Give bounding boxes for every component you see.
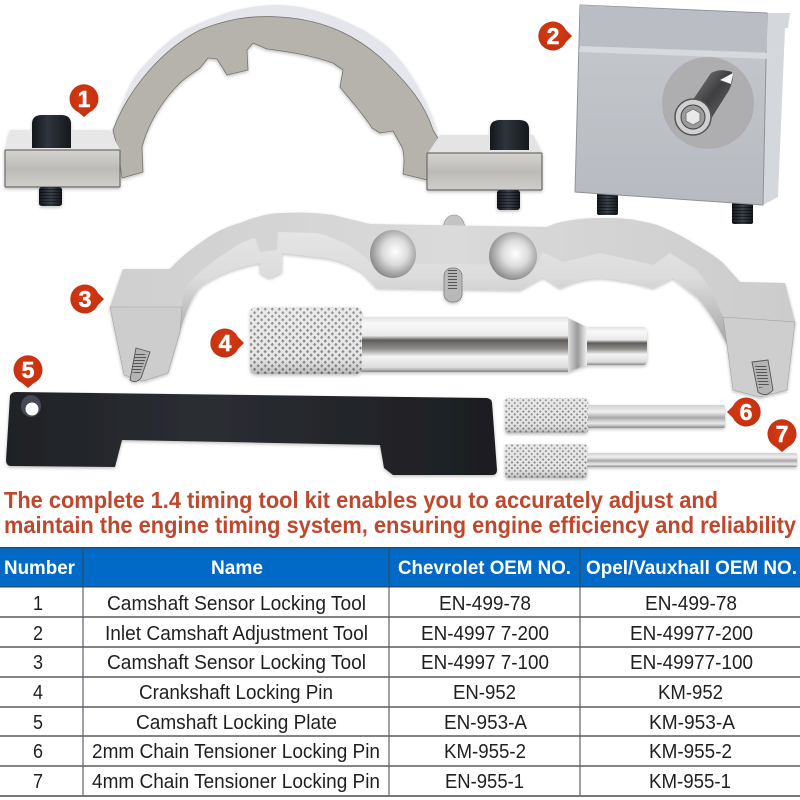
heading: The complete 1.4 timing tool kit enables you to accurately adjust and bbox=[4, 487, 718, 513]
tool 3 top pin dome bbox=[443, 215, 465, 228]
tool 2 slot bbox=[686, 70, 733, 127]
row 2: 2 bbox=[33, 623, 43, 645]
badge 7: 7 bbox=[776, 421, 788, 447]
row 2 bbox=[33, 623, 753, 645]
tool 2 side face bbox=[763, 13, 790, 205]
tool 1 bright top rim bbox=[113, 5, 437, 133]
row 2: Inlet Camshaft Adjustment Tool bbox=[105, 623, 368, 645]
row 1: 1 bbox=[33, 593, 43, 615]
row 3: 3 bbox=[33, 652, 43, 674]
badge 6 bbox=[727, 397, 761, 426]
row 7: EN-955-1 bbox=[445, 771, 524, 793]
table header row: Name bbox=[211, 557, 263, 579]
table header row: Number bbox=[4, 557, 75, 579]
tool 1: camshaft sensor locking tool bbox=[5, 5, 542, 210]
row 7 bbox=[33, 771, 731, 793]
tool 6: 2mm chain tensioner locking pin bbox=[505, 398, 725, 433]
tool 2 threads bbox=[597, 192, 753, 224]
badge 6: 6 bbox=[740, 399, 752, 425]
row 7: 4mm Chain Tensioner Locking Pin bbox=[92, 771, 380, 793]
row 1: Camshaft Sensor Locking Tool bbox=[107, 593, 366, 615]
badge 5: 5 bbox=[22, 357, 35, 383]
tool 6 shaft bbox=[586, 405, 725, 428]
tool 3 right pin bbox=[752, 360, 773, 395]
row 3 bbox=[33, 652, 753, 674]
row 5: 5 bbox=[33, 712, 43, 734]
badge 7 bbox=[768, 419, 797, 452]
row 4: Crankshaft Locking Pin bbox=[139, 682, 333, 704]
row 3: Camshaft Sensor Locking Tool bbox=[107, 652, 366, 674]
row 6: 6 bbox=[33, 741, 43, 763]
badge 3 bbox=[70, 284, 104, 314]
badge 4 bbox=[210, 329, 244, 358]
row 4: KM-952 bbox=[658, 682, 723, 704]
row 4: EN-952 bbox=[453, 682, 516, 704]
tool 1 right thread bbox=[497, 190, 520, 210]
tool 3: camshaft sensor locking tool bridge bbox=[110, 213, 795, 397]
row 3: EN-4997 7-100 bbox=[421, 652, 549, 674]
parts table bbox=[0, 547, 800, 796]
badge 1 bbox=[70, 84, 98, 117]
badge 1: 1 bbox=[78, 86, 91, 112]
tool 2 top band bbox=[580, 5, 767, 52]
table header row: Opel/Vauxhall OEM NO. bbox=[586, 557, 797, 579]
row 1 bbox=[33, 593, 737, 615]
tool 6 knurled grip bbox=[505, 398, 588, 433]
tool 1 right block bbox=[427, 120, 542, 210]
tool 1 left thread bbox=[39, 187, 62, 206]
row 5: KM-953-A bbox=[649, 712, 736, 734]
row 6: KM-955-2 bbox=[649, 741, 732, 763]
tool 3 silhouette mid face bbox=[110, 213, 795, 397]
row 5: EN-953-A bbox=[444, 712, 528, 734]
tool 4 shaft bbox=[361, 317, 568, 372]
row 7: 7 bbox=[33, 771, 43, 793]
row 2: EN-4997 7-200 bbox=[421, 623, 549, 645]
row 4: 4 bbox=[33, 682, 43, 704]
row 5 bbox=[33, 712, 736, 734]
tool 3 right block front face bbox=[723, 317, 795, 397]
badge 4: 4 bbox=[219, 330, 232, 356]
tool 1 right bolt bbox=[490, 120, 529, 150]
tool 7 knurled grip bbox=[505, 444, 587, 478]
tool 3 left block front face bbox=[110, 307, 182, 381]
tool 4 taper bbox=[568, 318, 587, 372]
tool 3 left pin bbox=[130, 348, 150, 382]
row 7: KM-955-1 bbox=[649, 771, 731, 793]
row 5: Camshaft Locking Plate bbox=[136, 712, 337, 734]
tool 2: inlet camshaft adjustment tool bbox=[575, 5, 790, 224]
tool 1 left bolt bbox=[32, 115, 71, 148]
tool 3 center pin bbox=[444, 268, 462, 302]
tool 4 knurled grip bbox=[250, 307, 362, 374]
tool 2 front face bbox=[575, 5, 767, 205]
tool 4 small tip bbox=[587, 327, 647, 365]
row 6: 2mm Chain Tensioner Locking Pin bbox=[92, 741, 380, 763]
tool 4: crankshaft locking pin bbox=[250, 307, 647, 374]
tool 1 arched face with notches bbox=[113, 17, 445, 180]
row 1: EN-499-78 bbox=[439, 593, 531, 615]
row 6 bbox=[33, 741, 732, 763]
table header row: Chevrolet OEM NO. bbox=[398, 557, 571, 579]
row 6: KM-955-2 bbox=[444, 741, 526, 763]
row 2: EN-49977-200 bbox=[630, 623, 753, 645]
tool 2 round recess bbox=[662, 57, 754, 149]
row 4 bbox=[33, 682, 723, 704]
badge 2 bbox=[538, 22, 572, 50]
badge 3: 3 bbox=[79, 286, 91, 312]
tool 5 mounting hole bbox=[21, 395, 41, 417]
tool 1 left block bbox=[5, 115, 120, 206]
tool 7: 4mm chain tensioner locking pin bbox=[505, 444, 797, 478]
tool 3 top face bbox=[110, 213, 795, 322]
tool 3 left hole bbox=[370, 230, 416, 278]
tool 2 groove bbox=[579, 46, 770, 59]
badge 5 bbox=[14, 355, 43, 388]
table header row bbox=[0, 547, 800, 588]
tool 7 shaft bbox=[585, 453, 797, 467]
heading bbox=[4, 487, 796, 538]
tool 2 screw bbox=[675, 99, 711, 135]
tool 5: black camshaft locking plate bbox=[6, 392, 497, 475]
row 3: EN-49977-100 bbox=[630, 652, 753, 674]
badge 2: 2 bbox=[547, 23, 559, 49]
tool 3 right hole bbox=[489, 232, 537, 280]
row 1: EN-499-78 bbox=[645, 593, 737, 615]
